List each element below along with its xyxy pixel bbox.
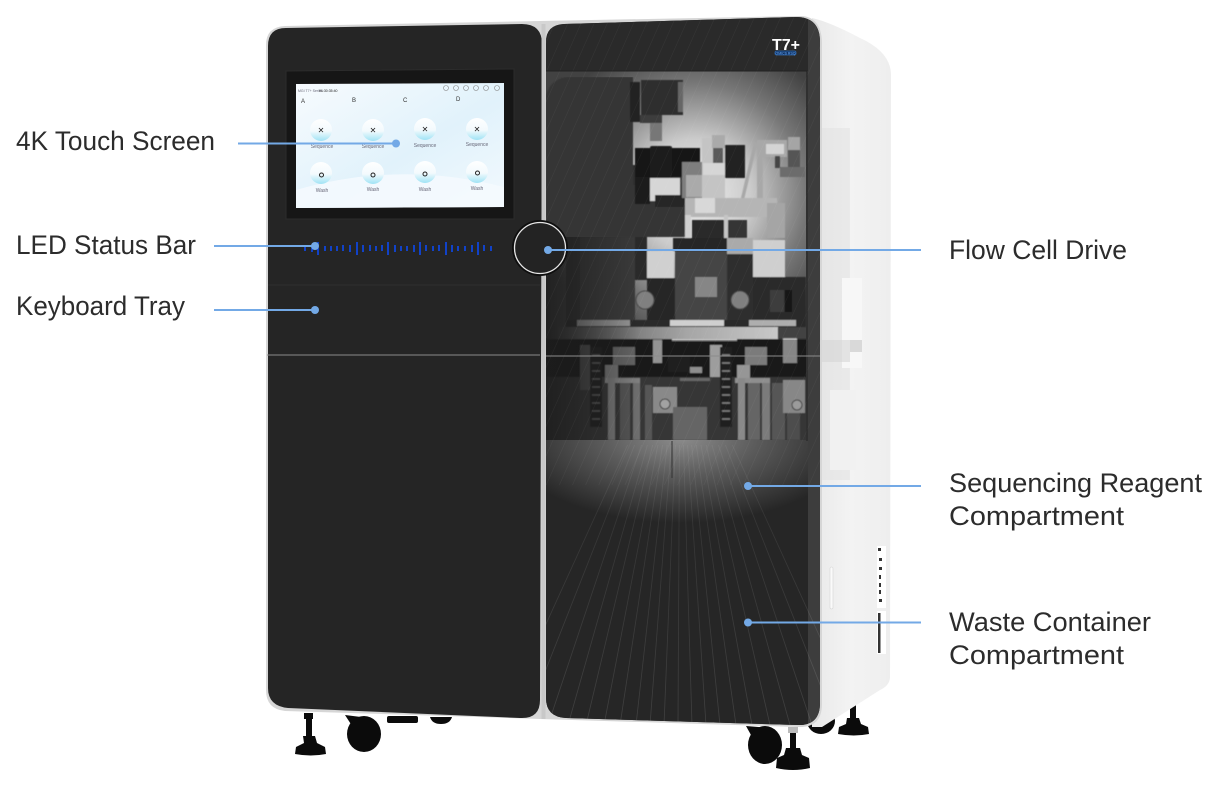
callout: Waste Container Compartment: Waste Container xyxy=(949,607,1151,637)
T7+ logo: T7+ xyxy=(772,37,800,54)
top frame band xyxy=(546,17,808,71)
sequence tiles: ✕ xyxy=(422,125,428,134)
wash tiles: Wash xyxy=(367,187,380,193)
front-left caster xyxy=(345,715,381,752)
side port panel xyxy=(877,546,886,654)
slot labels: D xyxy=(456,97,461,103)
callout: 4K Touch Screen: 4K Touch Screen xyxy=(16,126,215,156)
horizontal carriage bars xyxy=(547,320,808,357)
keyboard tray seam xyxy=(268,284,540,286)
rear-right caster xyxy=(807,708,835,734)
slot labels xyxy=(301,97,461,105)
screen header icons xyxy=(444,86,500,90)
interior backdrop xyxy=(546,72,806,340)
callout: Waste Container Compartment xyxy=(744,607,1151,670)
cabinet silver frame xyxy=(266,16,822,727)
callout: Keyboard Tray: Keyboard Tray xyxy=(16,291,185,321)
touch screen bezel xyxy=(286,69,514,219)
slot labels: B xyxy=(352,98,356,104)
diagonal door texture xyxy=(546,15,822,485)
callout: Waste Container Compartment: Compartment xyxy=(949,640,1125,670)
reagent handling machinery xyxy=(547,338,808,441)
side handle slot xyxy=(830,567,833,609)
right chain column xyxy=(720,347,732,427)
compartment divider xyxy=(672,441,673,478)
reagent and waste compartment panels xyxy=(546,440,820,725)
side faded interior xyxy=(822,128,850,480)
right frame column xyxy=(806,17,820,727)
door seam xyxy=(267,354,540,356)
callout: LED Status Bar: LED Status Bar xyxy=(16,230,196,260)
interior frame line xyxy=(546,71,807,441)
front-right levelling foot xyxy=(776,727,810,770)
callout: Sequencing Reagent Compartment xyxy=(744,468,1202,531)
machine feet and casters xyxy=(295,700,869,770)
wash tiles: Wash xyxy=(316,188,329,194)
callout: Keyboard Tray xyxy=(16,291,319,321)
optical module upper block xyxy=(546,77,700,237)
sequence tiles: ✕ xyxy=(474,125,480,134)
logo badge: OMICS RSQ xyxy=(775,51,796,55)
sequence tiles: ✕ xyxy=(318,126,324,135)
drive wheels xyxy=(636,291,654,309)
lens lower mount xyxy=(635,177,650,204)
screen header text: MGI T7+ Series xyxy=(298,89,323,93)
callout: 4K Touch Screen xyxy=(16,126,400,156)
sequence tiles: Sequence xyxy=(311,144,333,150)
side panel of the cabinet xyxy=(812,18,891,727)
front-right caster xyxy=(746,726,782,764)
lens barrel xyxy=(635,148,700,177)
flow cell stage blocks xyxy=(566,237,806,320)
sequence tiles: Sequence xyxy=(466,142,488,148)
touch screen xyxy=(296,83,504,208)
rear-right levelling foot xyxy=(838,700,869,736)
callout: Flow Cell Drive xyxy=(544,235,1127,265)
wash tiles: Wash xyxy=(419,187,432,193)
left darkening overlay xyxy=(546,237,632,440)
door gap xyxy=(542,24,546,719)
LED status bar xyxy=(305,242,491,255)
center white bracket xyxy=(710,345,722,377)
callout: LED Status Bar xyxy=(16,230,319,260)
slot labels: A xyxy=(301,99,305,105)
sequence tiles: ✕ xyxy=(370,126,376,135)
callout: Flow Cell Drive: Flow Cell Drive xyxy=(949,235,1127,265)
radial door lines xyxy=(546,446,820,725)
sequence tiles xyxy=(310,118,488,150)
touch screen: 01:30:35:40 xyxy=(319,89,338,93)
right door panel with see-through interior xyxy=(546,17,820,725)
wash tiles xyxy=(310,161,488,194)
slot labels: C xyxy=(403,98,408,104)
door seam xyxy=(546,356,820,357)
left chain column xyxy=(590,377,602,427)
machinery group xyxy=(546,77,808,441)
rear-left supports xyxy=(387,716,452,724)
left door panel xyxy=(267,24,542,718)
sequence tiles: Sequence xyxy=(362,144,384,150)
front-left levelling foot xyxy=(295,713,326,756)
scanning stage assemblies xyxy=(682,135,805,239)
lower machinery dimming overlay xyxy=(580,340,806,440)
camera xyxy=(641,80,683,115)
callout: Sequencing Reagent Compartment: Compartment xyxy=(949,501,1125,531)
wash tiles: Wash xyxy=(471,186,484,192)
sequence tiles: Sequence xyxy=(414,143,436,149)
callout: Sequencing Reagent Compartment: Sequencing Reagent xyxy=(949,468,1202,498)
right arm frame xyxy=(741,140,787,200)
flow cell drive dial xyxy=(512,220,568,276)
